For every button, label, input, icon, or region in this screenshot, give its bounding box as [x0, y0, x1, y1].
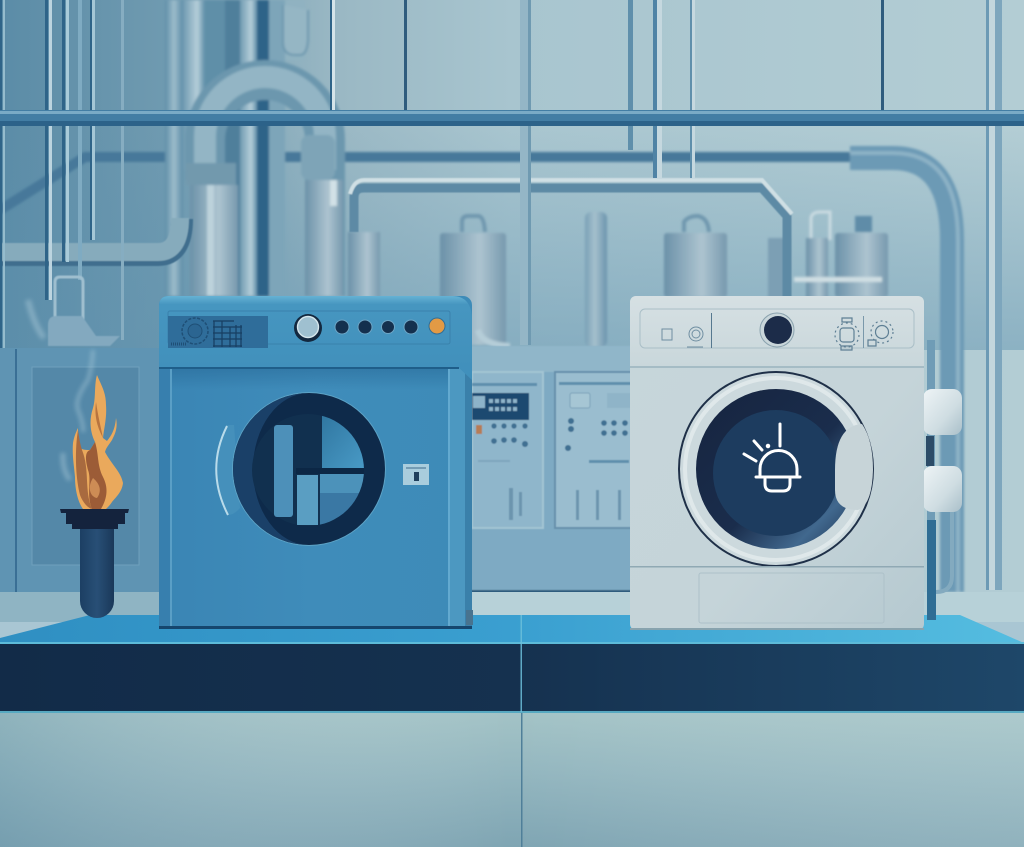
left wall cabinet [0, 348, 160, 593]
top control strip [630, 296, 924, 368]
large verticals behind the arch [165, 0, 305, 296]
far pipe run [0, 157, 855, 210]
soft distant pipes and tanks [0, 0, 958, 592]
hanging hook [283, 5, 308, 55]
background wall [0, 0, 1024, 600]
tall tank beside the arch [301, 135, 343, 296]
gas burner with flame [60, 375, 129, 618]
platform front [0, 643, 1024, 712]
warning sticker [403, 464, 429, 485]
burner post [80, 529, 114, 618]
top control strip [159, 296, 472, 380]
right elbow pipe [850, 158, 952, 592]
door handle [216, 425, 240, 515]
platform [0, 615, 1024, 713]
silver pipe loop above cabinet [350, 180, 792, 298]
selector dial [294, 314, 322, 342]
foot bracket [466, 610, 473, 625]
lower service panel [630, 566, 924, 623]
platform deck [0, 615, 1024, 643]
drum door [679, 372, 873, 566]
central control cabinet [470, 346, 635, 593]
thin verticals [0, 0, 1002, 590]
bell alert icon [744, 424, 800, 491]
programme icon [835, 318, 859, 350]
steam wisps [28, 300, 93, 480]
back floor [0, 592, 1024, 622]
small panel icons [662, 327, 703, 347]
right control panel [555, 372, 635, 528]
orange start button [429, 318, 445, 334]
buttons [335, 320, 418, 334]
blue gas laundry machine [159, 296, 473, 629]
drum door [232, 392, 386, 546]
storage tanks [348, 212, 888, 347]
temperature icon [868, 321, 893, 346]
left control panel [472, 372, 543, 528]
cabinet body [159, 296, 472, 628]
electric dial [760, 313, 794, 347]
background pipework [0, 0, 1024, 592]
elbow pipe on the left [0, 218, 182, 255]
door latch [835, 424, 873, 510]
burner head [60, 509, 129, 529]
flame [73, 375, 123, 509]
base edge [630, 628, 924, 630]
arch pipe [205, 77, 325, 296]
printed diagram label [168, 316, 268, 348]
white electric laundry machine with pipes [630, 296, 962, 630]
reflective floor [0, 713, 1024, 847]
padlock shaped valve and steam outlet [48, 277, 120, 346]
left tank below arch [186, 163, 238, 296]
front horizontal rail [0, 110, 1024, 126]
side pipes [923, 340, 962, 620]
cabinet body [630, 296, 924, 630]
